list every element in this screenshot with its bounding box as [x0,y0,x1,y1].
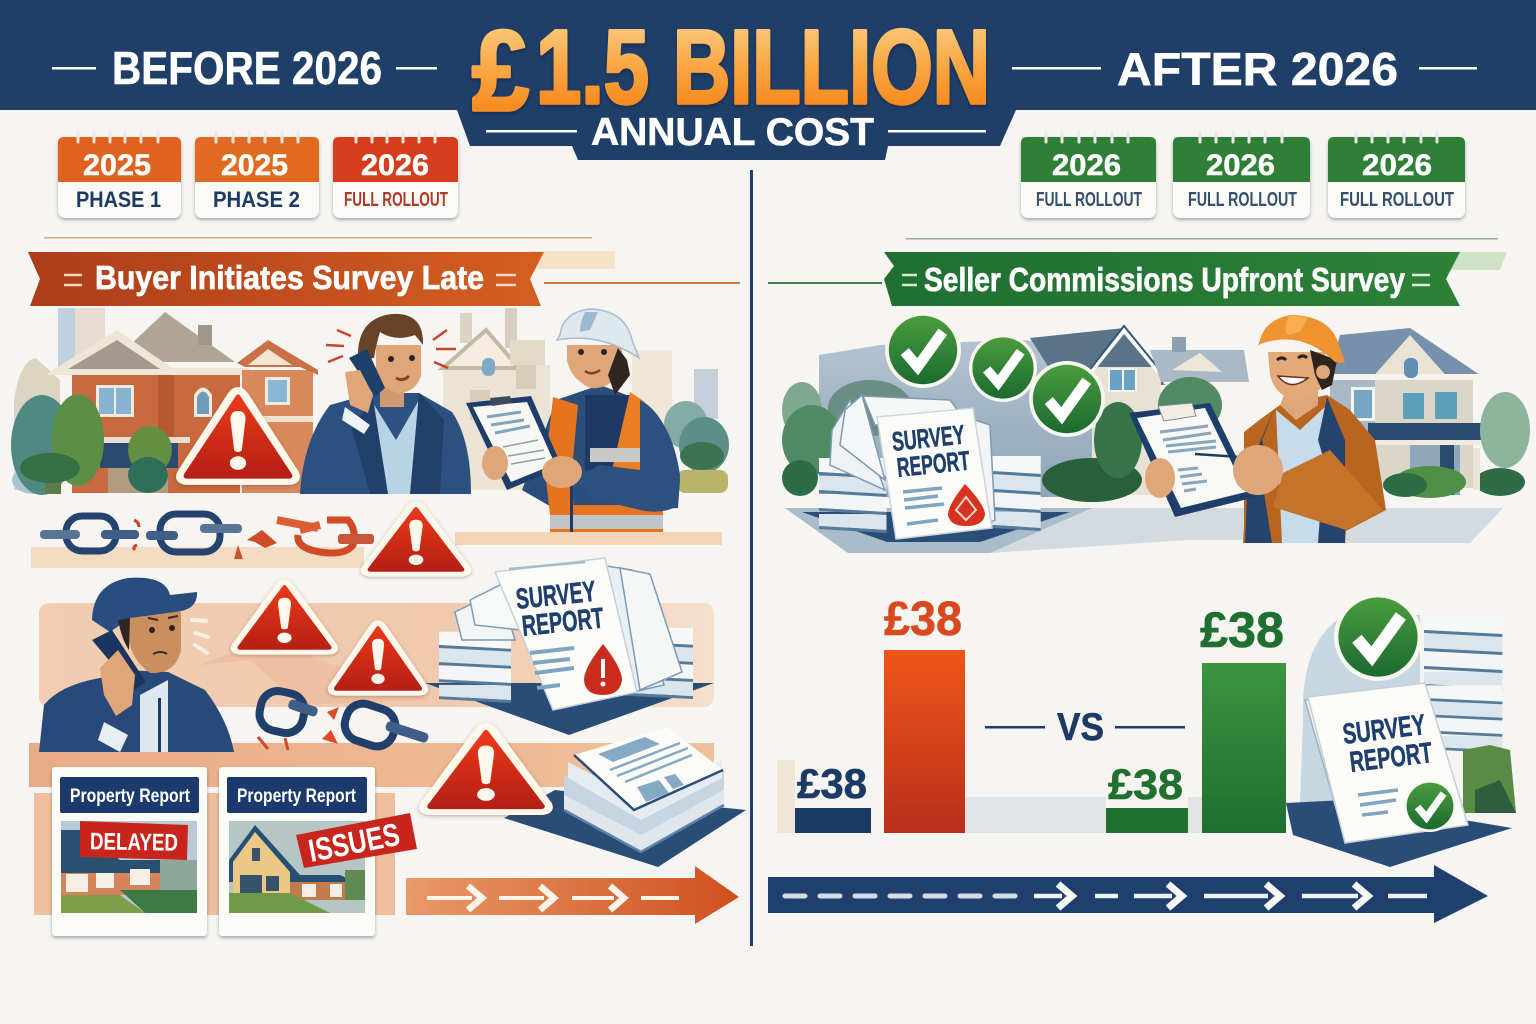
warning icon 5 [419,723,553,815]
report pile: survey report left [425,558,714,735]
report pile: survey report right: REPORT [895,445,972,483]
card: property report delayed: Property Report [70,786,191,807]
person: buyer on phone [300,314,471,494]
report pile: survey report right [785,395,1092,553]
calendar: 2026 full rollout green 1: 2026 [1052,149,1121,182]
chart: after bars: £38 [1200,602,1284,658]
trees: right scene [782,377,1530,502]
card: property report issues [219,767,417,936]
calendar: 2026 full rollout green 3 [1328,132,1465,218]
calendar: 2025 phase 1: 2025 [83,149,151,182]
calendar: 2026 full rollout red: 2026 [361,149,429,182]
calendar: 2026 full rollout green 3: 2026 [1362,149,1432,182]
person: seller surveyor [1129,315,1386,543]
chart baseline band [965,797,1106,833]
chain: second broken [256,688,429,751]
banner: buyer initiates survey late: Buyer Initiates Survey Late [95,259,484,296]
title: £1.5 billion [472,8,990,135]
report: survey report with check [1286,615,1516,867]
central divider [750,170,753,946]
calendar: 2026 full rollout green 1: FULL ROLLOUT [1036,189,1142,211]
calendar: 2026 full rollout red: FULL ROLLOUT [344,189,448,211]
scene: right houses [785,326,1503,553]
banner: seller commissions upfront survey: Seller Commissions Upfront Survey [924,261,1406,298]
calendar: 2025 phase 2: 2025 [221,149,288,182]
warning icon 2 [361,501,471,577]
person: worried buyer with cap [39,578,234,752]
report: survey report with check: REPORT [1348,737,1434,779]
warning icon 1 [176,387,300,485]
report: survey report with check: SURVEY [1341,709,1427,751]
report pile: survey report left: REPORT [520,603,605,643]
card: property report delayed [52,767,207,936]
heading: before 2026: BEFORE 2026 [112,42,382,94]
arrow: right timeline [768,865,1488,923]
vs label: VS [1057,706,1104,749]
report pile: small stack [504,727,746,867]
header band [0,0,1536,160]
card: property report delayed: DELAYED [90,828,178,857]
report pile: survey report left: SURVEY [514,576,597,616]
heading: after 2026: AFTER 2026 [1117,43,1398,95]
calendar: 2025 phase 1: PHASE 1 [76,187,161,212]
banner: seller commissions upfront survey [768,238,1507,306]
icon: clipboard, left scene [466,396,582,490]
card: property report issues: Property Report [237,786,357,807]
calendar: 2026 full rollout green 2: FULL ROLLOUT [1188,189,1297,211]
report pile: survey report right: SURVEY [890,420,966,457]
check badge 2 [969,334,1037,402]
card: property report issues: ISSUES [305,816,403,869]
chart: before bars: £38 [797,760,867,807]
warning icon 3 [231,579,338,655]
check badge large [1334,593,1422,681]
calendar: 2026 full rollout green 3: FULL ROLLOUT [1340,189,1454,211]
check badge 3 [1029,361,1105,437]
chart: after bars [1106,602,1286,833]
chart: after bars: £38 [1108,761,1183,809]
calendar: 2026 full rollout red [333,132,458,218]
chain: broken [31,514,722,568]
panel bands: left lower [29,603,714,915]
calendar: 2026 full rollout green 1 [1021,132,1156,218]
calendar: 2025 phase 2 [195,132,319,218]
chart: before bars: £38 [884,593,962,646]
calendar: 2025 phase 2: PHASE 2 [213,187,300,212]
warning icon 4 [328,620,428,696]
title: £1.5 billion: BILLION [673,9,990,126]
chart: before bars [777,593,965,833]
title: £1.5 billion: 1.5 [536,9,649,126]
scene: left houses [14,308,718,493]
subtitle: annual cost: ANNUAL COST [591,111,874,154]
trees: left scene [11,394,729,495]
calendar: 2026 full rollout green 2 [1173,132,1310,218]
banner: buyer initiates survey late [28,237,740,306]
calendar: 2025 phase 1 [58,132,181,218]
arrow: left timeline [406,866,739,924]
check badge 1 [885,312,961,388]
title: £1.5 billion: £ [472,8,529,135]
person: surveyor with clipboard [522,309,680,544]
calendar: 2026 full rollout green 2: 2026 [1206,149,1275,182]
